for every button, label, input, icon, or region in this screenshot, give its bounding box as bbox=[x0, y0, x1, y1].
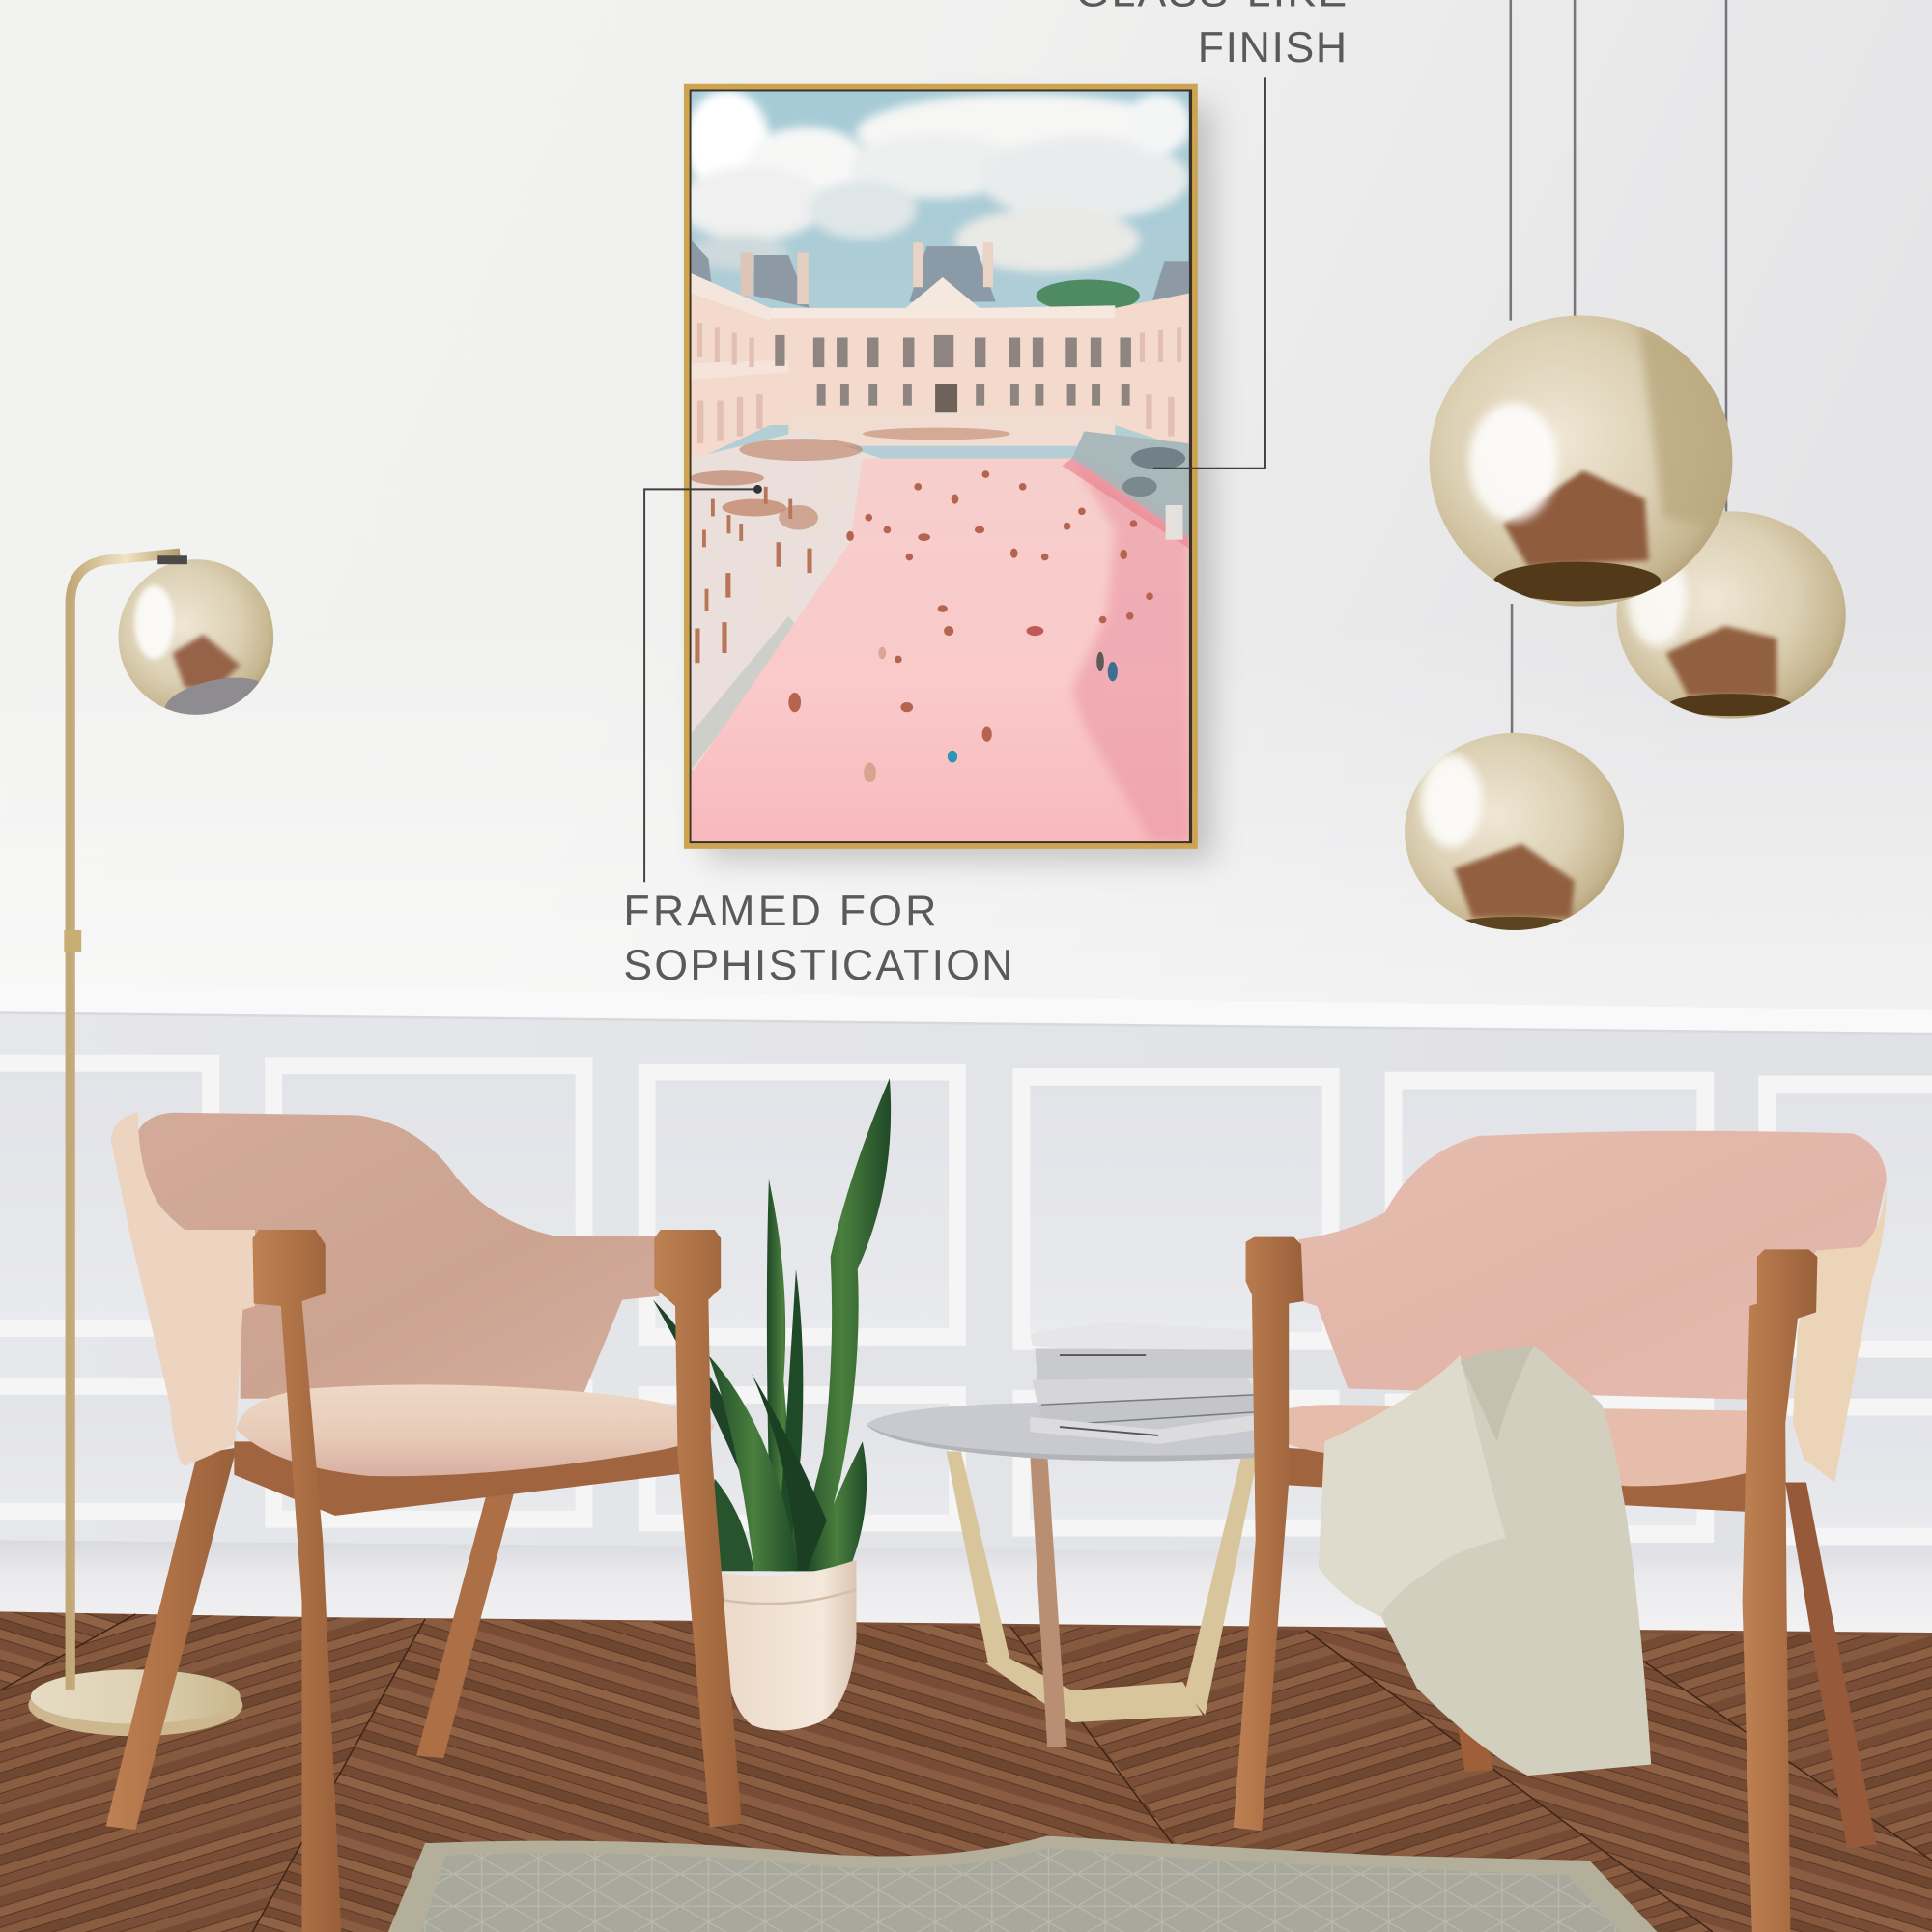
floor lamp bbox=[28, 554, 273, 1736]
lower pendant globe bbox=[1405, 733, 1624, 931]
backrest side bbox=[111, 1113, 255, 1466]
rear right leg bbox=[1785, 1482, 1877, 1848]
pendant lamps bbox=[1405, 0, 1846, 931]
callout text bbox=[1076, 0, 1347, 71]
rear left leg bbox=[1457, 1717, 1493, 1772]
backrest bbox=[1298, 1131, 1887, 1400]
right chair bbox=[1234, 1131, 1887, 1932]
clouds bbox=[678, 90, 1190, 272]
backrest bbox=[133, 1113, 659, 1399]
seat rail bbox=[1283, 1448, 1749, 1512]
seat rail bbox=[234, 1441, 696, 1516]
callout text: FINISH bbox=[1198, 24, 1347, 71]
pink pool bbox=[692, 458, 1189, 841]
rear back leg bbox=[416, 1493, 514, 1758]
side table bbox=[867, 1403, 1260, 1747]
lamp pole bbox=[71, 554, 180, 1690]
backrest side bbox=[1793, 1180, 1887, 1482]
statues bbox=[1165, 505, 1182, 540]
front left arm and leg bbox=[1234, 1237, 1303, 1831]
callout text: SOPHISTICATION bbox=[623, 942, 1012, 989]
table top bbox=[867, 1403, 1260, 1461]
leader line bbox=[1153, 77, 1265, 469]
lamp base bbox=[28, 1669, 242, 1736]
seat bbox=[1270, 1405, 1749, 1486]
left chair bbox=[106, 1113, 742, 1932]
frame shadow bbox=[707, 106, 1212, 860]
plant pot bbox=[719, 1560, 856, 1731]
table legs bbox=[947, 1452, 1258, 1747]
gold frame bbox=[684, 84, 1198, 849]
windows bbox=[775, 335, 1131, 419]
framed painting bbox=[678, 84, 1212, 860]
artwork bbox=[678, 90, 1190, 841]
wainscot panelling bbox=[0, 983, 1932, 1638]
lamp globe bbox=[118, 555, 273, 730]
large pendant globe bbox=[1430, 316, 1737, 607]
snake plant bbox=[653, 1078, 891, 1571]
wall background bbox=[0, 0, 1932, 1035]
people on the terrace bbox=[690, 428, 1185, 663]
swimmers bbox=[788, 470, 1153, 782]
front right arm and leg bbox=[1743, 1249, 1817, 1932]
callout text: FRAMED FOR bbox=[623, 888, 936, 935]
callout: glass-like finish bbox=[1076, 0, 1347, 469]
throw blanket bbox=[1319, 1346, 1651, 1776]
front left arm and leg bbox=[252, 1230, 341, 1932]
callout text bbox=[623, 888, 1012, 989]
plaza left bbox=[692, 431, 881, 770]
pendant cords bbox=[1511, 0, 1726, 734]
stack of books bbox=[1030, 1322, 1260, 1444]
plaza right bbox=[1072, 431, 1189, 542]
palace bbox=[692, 241, 1189, 462]
front right arm and leg bbox=[654, 1230, 742, 1828]
rear left leg bbox=[106, 1448, 237, 1830]
callout: framed for sophistication bbox=[623, 485, 1012, 989]
seat bbox=[237, 1384, 715, 1476]
rug bbox=[388, 1836, 1658, 1932]
right pendant globe bbox=[1616, 511, 1846, 719]
leader line bbox=[644, 485, 762, 882]
herringbone wood floor bbox=[0, 1611, 1932, 1932]
